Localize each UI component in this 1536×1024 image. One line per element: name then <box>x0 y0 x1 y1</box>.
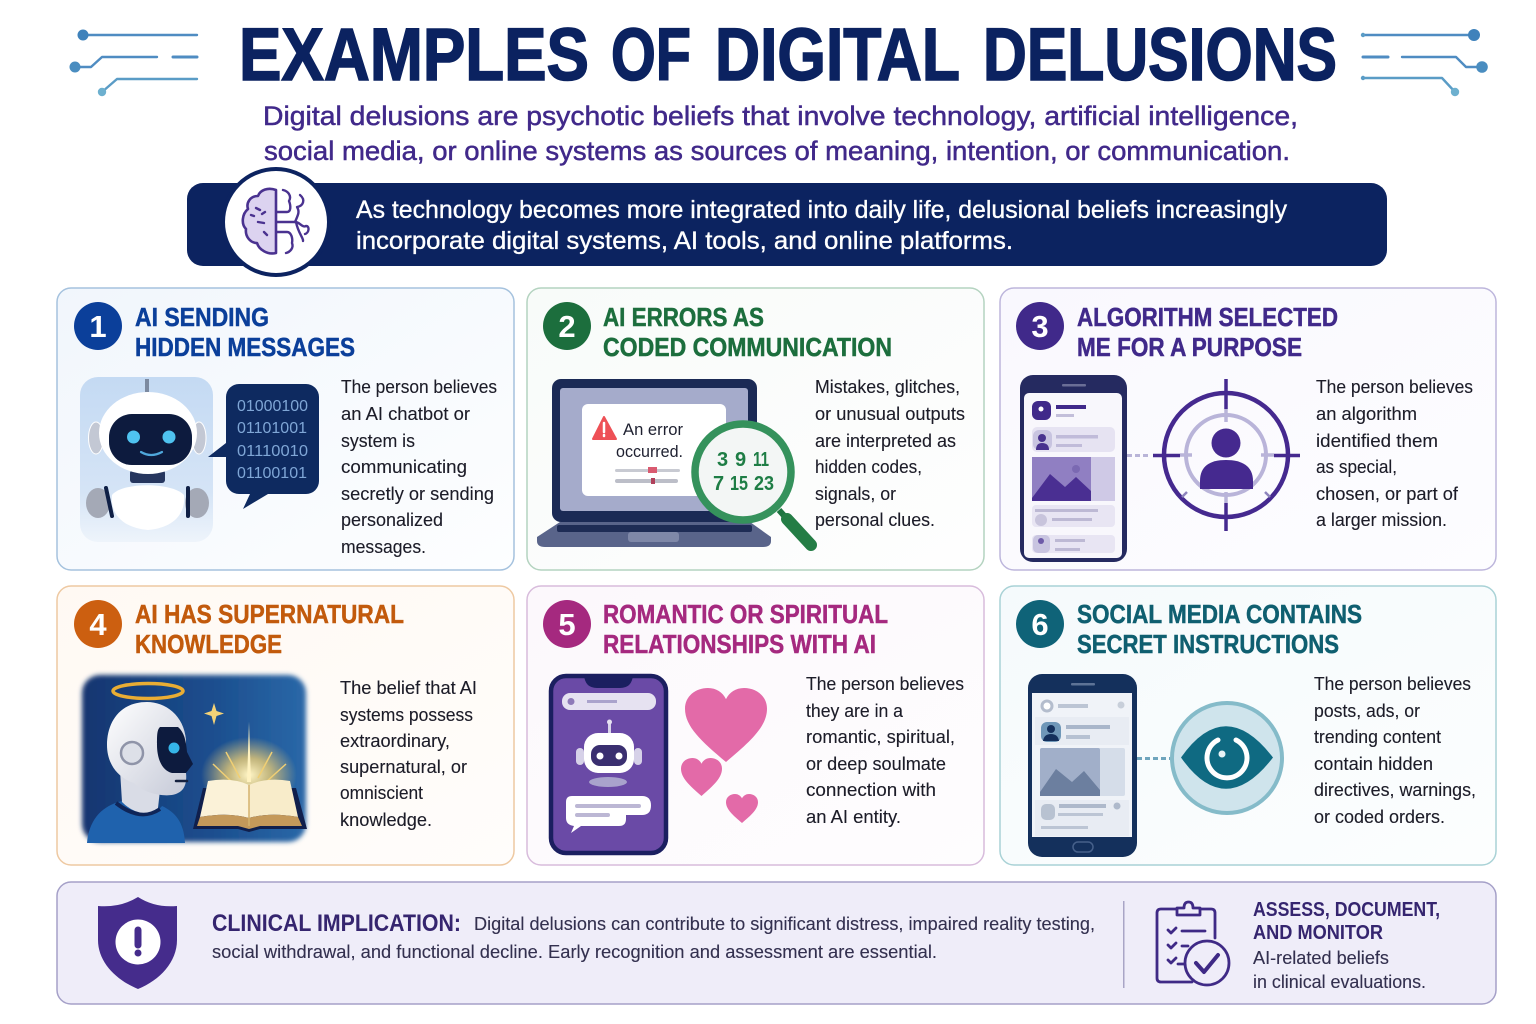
icon: brain <box>223 169 329 275</box>
text block 5 <box>806 673 964 827</box>
subtitle: Digital delusions are psychotic beliefs that involve technology, artificial intelligence, <box>263 101 1298 131</box>
number badge 1: 1 <box>89 309 107 344</box>
circuit decoration right <box>1361 29 1488 96</box>
banner <box>187 183 1387 266</box>
icon: magnifying glass with numbers: 15 <box>730 473 748 495</box>
number badge 3: 3 <box>1031 309 1049 344</box>
number badge 3 <box>1016 302 1064 350</box>
panel: 5 Romantic or spiritual relationships with AI <box>527 586 984 865</box>
text block 6: or coded orders. <box>1314 806 1445 827</box>
assess, document, monitor text: AND MONITOR <box>1253 922 1383 944</box>
text block 1: messages. <box>341 536 426 557</box>
text block 6: contain hidden <box>1314 753 1433 774</box>
icon: hearts <box>681 688 767 823</box>
text block 5: romantic, spiritual, <box>806 726 955 747</box>
panel: clinical implication footer <box>57 882 1496 1004</box>
text block 5: The person believes <box>806 673 964 694</box>
text block 5: they are in a <box>806 700 904 721</box>
text block 1: system is <box>341 430 415 451</box>
text block 4: supernatural, or <box>340 756 467 777</box>
illustration: robot <box>80 377 213 542</box>
panel: 2 AI errors as coded communication <box>527 288 984 570</box>
icon: magnifying glass with numbers <box>695 424 811 545</box>
title: DELUSIONS <box>983 13 1337 96</box>
clinical implication text <box>212 910 1095 962</box>
heading 1 <box>135 302 355 362</box>
panel: 1 AI sending hidden messages <box>57 288 514 570</box>
clinical implication text: social withdrawal, and functional decline. Early recognition and assessment are essential. <box>212 942 937 962</box>
speech bubble: binary: 01110010 <box>237 443 308 460</box>
heading 5: RELATIONSHIPS WITH AI <box>603 629 876 659</box>
assess, document, monitor text: ASSESS, DOCUMENT, <box>1253 899 1440 921</box>
heading 3: ME FOR A PURPOSE <box>1077 332 1302 362</box>
text block 2: signals, or <box>815 483 896 504</box>
text block 1: The person believes <box>341 376 497 397</box>
text block 1: personalized <box>341 509 443 530</box>
dashed connector <box>1127 454 1150 457</box>
number badge 1 <box>74 302 122 350</box>
text block 4: knowledge. <box>340 809 432 830</box>
assess, document, monitor text: in clinical evaluations. <box>1253 972 1426 992</box>
title: OF <box>611 13 691 96</box>
illustration: phone feed <box>1020 375 1127 562</box>
text block 2: personal clues. <box>815 509 935 530</box>
text block 6: posts, ads, or <box>1314 700 1420 721</box>
circuit decoration left <box>70 30 197 96</box>
text block 1: communicating <box>341 456 467 477</box>
dashed connector <box>1137 757 1170 760</box>
illustration: phone with social feed <box>1028 674 1137 857</box>
text block 6: The person believes <box>1314 673 1471 694</box>
icon: magnifying glass with numbers: 23 <box>754 473 774 495</box>
icon: clipboard check <box>1157 902 1229 985</box>
icon: magnifying glass with numbers: 3 <box>717 449 728 471</box>
text block 2: Mistakes, glitches, <box>815 376 960 397</box>
heading 3: ALGORITHM SELECTED <box>1077 302 1338 332</box>
number badge 5: 5 <box>558 607 576 642</box>
panel: 6 Social media contains secret instructions <box>1000 586 1496 865</box>
number badge 2 <box>543 302 591 350</box>
heading 5: ROMANTIC OR SPIRITUAL <box>603 599 888 629</box>
heading 2 <box>603 302 892 362</box>
text block 3: an algorithm <box>1316 403 1417 424</box>
text block 4 <box>340 677 477 830</box>
text block 1: an AI chatbot or <box>341 403 470 424</box>
text block 4: systems possess <box>340 704 473 725</box>
text block 5: connection with <box>806 779 936 800</box>
banner: incorporate digital systems, AI tools, and online platforms. <box>356 227 1013 255</box>
clinical implication text: CLINICAL IMPLICATION: <box>212 910 461 937</box>
heading 6: SECRET INSTRUCTIONS <box>1077 629 1339 659</box>
heading 5 <box>603 599 888 659</box>
text block 6 <box>1314 673 1476 827</box>
text block 3: chosen, or part of <box>1316 483 1459 504</box>
title: EXAMPLES <box>239 13 589 96</box>
text block 3: as special, <box>1316 456 1397 477</box>
icon: target on person <box>1153 379 1300 531</box>
text block 3 <box>1316 376 1473 530</box>
panel: 4 AI has supernatural knowledge <box>57 586 514 865</box>
speech bubble: binary <box>208 384 319 509</box>
text block 4: The belief that AI <box>340 677 477 698</box>
text block 5: or deep soulmate <box>806 753 946 774</box>
panel: 3 Algorithm selected me for a purpose <box>1000 288 1496 570</box>
heading 6 <box>1077 599 1362 659</box>
icon: shield <box>98 897 177 989</box>
text block 3: identified them <box>1316 430 1438 451</box>
text block 6: directives, warnings, <box>1314 779 1476 800</box>
heading 1: HIDDEN MESSAGES <box>135 332 355 362</box>
heading 6: SOCIAL MEDIA CONTAINS <box>1077 599 1362 629</box>
text block 3: a larger mission. <box>1316 509 1447 530</box>
number badge 6: 6 <box>1031 607 1049 642</box>
text block 1 <box>341 376 497 557</box>
number badge 2: 2 <box>558 309 576 344</box>
icon: eye <box>1172 703 1282 813</box>
speech bubble: binary: 01000100 <box>237 398 308 415</box>
assess, document, monitor text <box>1253 899 1440 992</box>
text block 2: are interpreted as <box>815 430 956 451</box>
text block 3: The person believes <box>1316 376 1473 397</box>
text block 5: an AI entity. <box>806 806 901 827</box>
text block 2 <box>815 376 965 530</box>
text block 2: or unusual outputs <box>815 403 965 424</box>
icon: magnifying glass with numbers: 7 <box>713 473 724 495</box>
icon: magnifying glass with numbers: 11 <box>753 449 769 471</box>
text block 4: extraordinary, <box>340 730 450 751</box>
number badge 4 <box>74 600 122 648</box>
text block 6: trending content <box>1314 726 1441 747</box>
assess, document, monitor text: AI-related beliefs <box>1253 948 1389 968</box>
text block 1: secretly or sending <box>341 483 494 504</box>
clinical implication text: Digital delusions can contribute to significant distress, impaired reality testing, <box>474 914 1095 934</box>
icon: magnifying glass with numbers: 9 <box>735 449 746 471</box>
heading 2: AI ERRORS AS <box>603 302 764 332</box>
subtitle <box>263 101 1298 166</box>
illustration: laptop with error <box>537 379 771 547</box>
banner: As technology becomes more integrated into daily life, delusional beliefs increasingly <box>356 196 1287 224</box>
number badge 5 <box>543 600 591 648</box>
title <box>239 13 1337 96</box>
heading 4: KNOWLEDGE <box>135 629 282 659</box>
heading 2: CODED COMMUNICATION <box>603 332 892 362</box>
divider <box>1123 901 1124 988</box>
text block 2: hidden codes, <box>815 456 922 477</box>
illustration: AI with halo and glowing book <box>82 675 307 843</box>
title: DIGITAL <box>715 13 960 96</box>
speech bubble: binary: 01100101 <box>237 465 307 482</box>
heading 4: AI HAS SUPERNATURAL <box>135 599 404 629</box>
illustration: laptop with error: An error <box>623 420 683 439</box>
heading 1: AI SENDING <box>135 302 269 332</box>
subtitle: social media, or online systems as sources of meaning, intention, or communication. <box>264 136 1290 166</box>
illustration: laptop with error: occurred. <box>616 442 683 461</box>
illustration: phone with chatbot <box>551 675 666 853</box>
number badge 6 <box>1016 600 1064 648</box>
heading 4 <box>135 599 404 659</box>
heading 3 <box>1077 302 1338 362</box>
text block 4: omniscient <box>340 782 423 803</box>
number badge 4: 4 <box>89 607 107 642</box>
speech bubble: binary: 01101001 <box>237 420 307 437</box>
